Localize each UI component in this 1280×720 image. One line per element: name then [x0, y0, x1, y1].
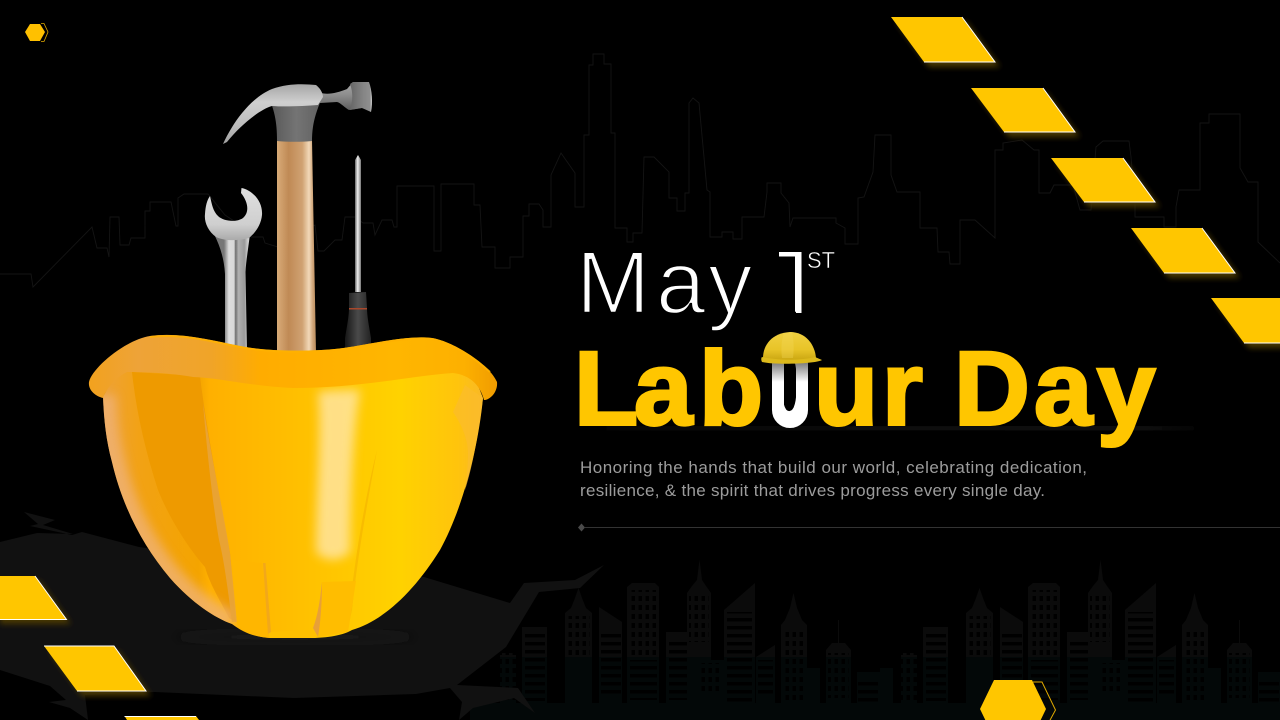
- cracked ground: [0, 512, 604, 720]
- title: Labour Day: [574, 286, 1155, 457]
- hammer claw: [223, 84, 323, 144]
- stripe 3: [124, 716, 199, 720]
- hammer neck: [271, 98, 322, 142]
- helmet brim: [89, 335, 497, 400]
- helmet left crease: [203, 403, 237, 622]
- hammer handle: [277, 140, 316, 352]
- helmet edge sheen: [103, 395, 232, 624]
- icon: small helmet on the letter: [761, 332, 822, 364]
- divider with diamond marker: [578, 524, 1280, 532]
- icon: hammer: [223, 82, 372, 352]
- icon: screwdriver: [345, 155, 371, 350]
- title: May 1st: ST: [807, 247, 835, 273]
- stripe 1: [0, 576, 71, 624]
- large yellow helmet: [89, 335, 497, 638]
- stripe 3: [1051, 158, 1160, 207]
- stripe 2: [44, 646, 151, 696]
- helmet dark side panel: [132, 372, 236, 622]
- icon: wrench: [205, 188, 262, 350]
- hexagon marker: top left: [25, 24, 48, 42]
- helmet right crease: [347, 450, 377, 632]
- helmet bottom tabs: [232, 560, 270, 638]
- stripes: top right diagonal: [891, 17, 1280, 348]
- helmet centre highlight: [316, 390, 360, 560]
- stripes: bottom left diagonal: [0, 576, 199, 720]
- description text: Honoring the hands that build our world, celebrating dedication,: [580, 458, 1087, 477]
- helmet right edge fold: [453, 385, 483, 490]
- title: Labour Day: o: [771, 286, 808, 457]
- stripe 1: [891, 17, 1000, 67]
- stripe 5: [1211, 298, 1280, 348]
- background skyline outline: [0, 54, 1280, 287]
- glow line beneath title: [550, 427, 1210, 430]
- hammer head connector and face: [316, 82, 368, 110]
- title: May 1st: May 1: [576, 232, 816, 332]
- bottom city silhouette: [470, 560, 1280, 720]
- floor glow under helmet: [175, 633, 415, 641]
- description text: resilience, & the spirit that drives progress every single day.: [580, 481, 1045, 500]
- helmet brim top edge: [150, 336, 490, 372]
- helmet bowl: [103, 365, 483, 638]
- title: Labour Day: Lab: [574, 330, 763, 448]
- description text: [580, 458, 1087, 500]
- title: Labour Day: ur Day: [814, 330, 1155, 448]
- stripe 4: [1131, 228, 1240, 278]
- stripe 2: [971, 88, 1080, 137]
- hexagon marker: bottom centre: [980, 680, 1056, 720]
